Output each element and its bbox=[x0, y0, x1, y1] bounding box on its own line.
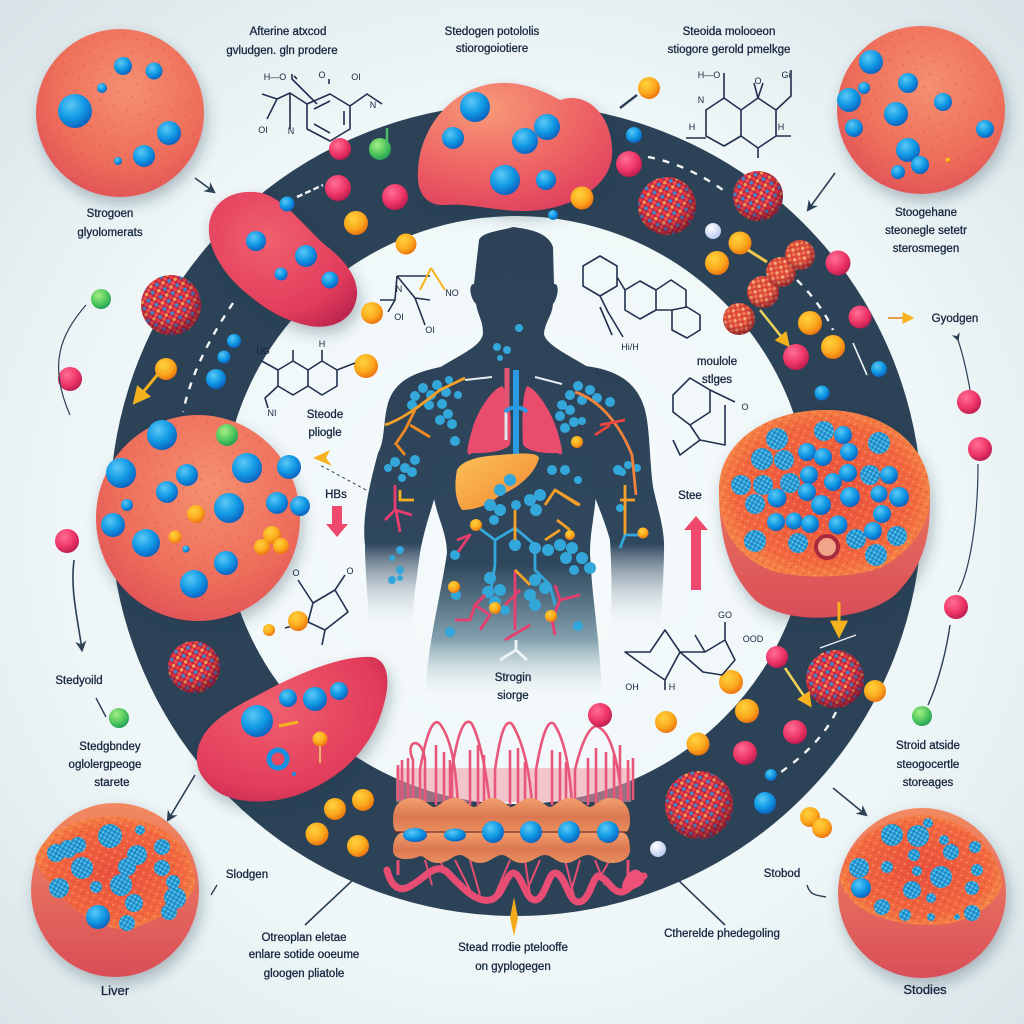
panel: bottom-left cut sphere (liver) bbox=[31, 803, 199, 977]
label: glycogen: Gyodgen bbox=[932, 313, 978, 325]
chemical structure: lower right: GO bbox=[718, 610, 732, 620]
label: steroid left: Stedyoild bbox=[55, 675, 103, 687]
label: strogin storage bbox=[495, 672, 531, 702]
label: steroid pliogle: Steode bbox=[307, 409, 343, 421]
chemical structure: top left bbox=[258, 70, 382, 141]
chemical structure: lower left: O bbox=[346, 566, 354, 576]
heading: top left: Afterine atxcod bbox=[250, 26, 326, 38]
ring: dark circular pathway bbox=[166, 160, 866, 860]
label: lower centre-right: Ctherelde phedegoling bbox=[664, 928, 780, 940]
label: storage glycolmerats: glyolomerats bbox=[77, 227, 143, 239]
chemical structure: centre left bbox=[380, 268, 459, 335]
chemical structure: left of steroid: UG bbox=[256, 346, 270, 356]
chemical structure: top left: O bbox=[318, 70, 326, 80]
label: lower left: oglolergpeoge bbox=[69, 759, 141, 771]
label: HB: HBs bbox=[325, 489, 347, 501]
chemical structure: lower left: O bbox=[292, 568, 300, 578]
chemical structure: top right: N bbox=[698, 95, 704, 105]
branching chains bbox=[385, 378, 640, 660]
label: lower centre-left: enlare sotide ooeume bbox=[249, 949, 359, 961]
dashed path inside ring bbox=[183, 157, 836, 772]
chemical structure: right muscle label side bbox=[673, 378, 749, 455]
chemical structure: centre left: OI bbox=[394, 312, 404, 322]
chemical structure: top right: O bbox=[754, 76, 762, 86]
heading: top centre bbox=[445, 26, 540, 55]
label: right steroid: Stoogehane bbox=[895, 207, 957, 219]
label: lower right bbox=[896, 740, 960, 789]
liver organ bbox=[455, 453, 539, 510]
chemical structure: top left: H—O bbox=[264, 72, 286, 82]
chemical structure: top right: H bbox=[778, 122, 784, 132]
panel: upper-left liver lobe bbox=[209, 192, 357, 327]
label: lower centre: on gyplogegen bbox=[475, 961, 551, 973]
label: right steroid: sterosmegen bbox=[893, 243, 959, 255]
chemical structure: right muscle label side: O bbox=[741, 402, 749, 412]
label: steroid pliogle bbox=[307, 409, 343, 439]
label: stobod: Stobod bbox=[764, 868, 800, 880]
label: strogin storage: siorge bbox=[497, 690, 529, 702]
panel: right tissue cylinder bbox=[719, 410, 930, 618]
label: stee: Stee bbox=[678, 490, 702, 502]
label: lower left: Stedgbndey bbox=[79, 741, 141, 753]
body silhouette bbox=[364, 227, 664, 695]
heading: top left: gvludgen. gln prodere bbox=[226, 45, 338, 57]
chemical structure: centre left: NO bbox=[445, 288, 459, 298]
panel: top-right glycogen sphere bbox=[837, 26, 1005, 194]
label: lower centre-left: gloogen pliatole bbox=[264, 968, 344, 980]
coloured arrows bbox=[135, 128, 839, 705]
chemical structure: left of steroid: H bbox=[319, 339, 325, 349]
label: stodies: Stodies bbox=[903, 982, 947, 997]
end blobs bbox=[622, 870, 644, 890]
molecules: free spheres on and around the ring bbox=[55, 77, 992, 857]
molecule clusters bbox=[384, 324, 641, 637]
chemical structure: top right bbox=[686, 70, 791, 158]
label: storage glycolmerats bbox=[77, 208, 143, 239]
fibre arches bbox=[398, 722, 633, 805]
chemical structure: top right: H—O bbox=[698, 70, 720, 80]
chemical structure: top left: OI bbox=[258, 125, 268, 135]
heading: top right: stiogore gerold pmelkge bbox=[668, 44, 790, 56]
raspberry glycogen granules bbox=[141, 171, 864, 839]
panel: lower-left liver lobe bbox=[197, 657, 387, 802]
label: lower centre: Stead rrodie ptelooffe bbox=[458, 942, 568, 954]
chemical structure: lower left bbox=[263, 566, 354, 645]
heading: top centre: stiorogoiotiere bbox=[456, 43, 528, 55]
fibre backing bbox=[396, 768, 631, 802]
windpipe bbox=[465, 368, 562, 455]
panel: muscle fibre bbox=[387, 722, 644, 936]
upper muscle band bbox=[393, 798, 630, 832]
label: lower centre-left: Otreoplan eletae bbox=[261, 932, 347, 944]
arrows bbox=[59, 95, 978, 925]
chemical structure: lower right: H bbox=[669, 682, 675, 692]
label: lower right: steogocertle bbox=[897, 759, 959, 771]
heading: top right bbox=[668, 26, 790, 56]
chemical structure: top right: H bbox=[689, 122, 695, 132]
label: steroid pliogle: pliogle bbox=[308, 427, 342, 439]
chemical structure: lower right: OOD bbox=[743, 634, 764, 644]
panel: top-left glycogen sphere bbox=[36, 29, 204, 197]
left arm bbox=[364, 366, 450, 640]
label: glodgen: Slodgen bbox=[226, 869, 268, 881]
glycogen beads bbox=[403, 821, 619, 843]
right arm bbox=[580, 366, 664, 640]
label: muscle stages: stlges bbox=[702, 374, 732, 386]
lower muscle band bbox=[393, 832, 630, 863]
label: right steroid: steonegle setetr bbox=[885, 225, 967, 237]
label: lower right: storeages bbox=[903, 777, 953, 789]
chemical structure: top left: OI bbox=[351, 72, 361, 82]
label: muscle stages bbox=[697, 356, 737, 386]
label: storage glycolmerats: Strogoen bbox=[87, 208, 133, 220]
label: lower left bbox=[69, 741, 141, 789]
label: lower centre-left bbox=[249, 932, 359, 980]
panel: bottom-right cut sphere (stodies) bbox=[838, 808, 1006, 978]
orange pointer below fibre bbox=[510, 897, 518, 936]
chemical structure: lower right: OH bbox=[625, 682, 639, 692]
chemical structure: top left: N bbox=[370, 100, 376, 110]
chemical structure: top right: Gi bbox=[782, 70, 791, 80]
chemical structure: centre right: Hi/H bbox=[621, 342, 639, 352]
panel: left large glycogen sphere bbox=[96, 415, 310, 621]
heading: top centre: Stedogen potololis bbox=[445, 26, 540, 38]
label: lower right: Stroid atside bbox=[896, 740, 960, 752]
label: strogin storage: Strogin bbox=[495, 672, 531, 684]
panel: top liver lobe bbox=[418, 83, 612, 211]
lower wavy fibres bbox=[387, 860, 644, 902]
label: lower left: starete bbox=[94, 777, 130, 789]
chemical structure: lower right bbox=[625, 610, 764, 692]
chemical structure: centre left: OI bbox=[425, 325, 435, 335]
label: muscle stages: moulole bbox=[697, 356, 737, 368]
chemical structure: centre right bbox=[583, 256, 700, 352]
chemical structure: left of steroid bbox=[256, 339, 355, 418]
chemical structure: centre left: N bbox=[396, 284, 402, 294]
label: right steroid bbox=[885, 207, 967, 255]
heading: top right: Steoida molooeon bbox=[683, 26, 775, 38]
chemical structure: top left: N bbox=[288, 126, 294, 136]
orange nodes bbox=[448, 436, 648, 622]
lungs bbox=[468, 386, 562, 454]
label: liver: Liver bbox=[101, 983, 130, 998]
heading: top left bbox=[226, 26, 338, 57]
chemical structure: left of steroid: NI bbox=[268, 408, 276, 418]
torso and head bbox=[426, 227, 602, 695]
label: lower centre bbox=[458, 942, 568, 973]
